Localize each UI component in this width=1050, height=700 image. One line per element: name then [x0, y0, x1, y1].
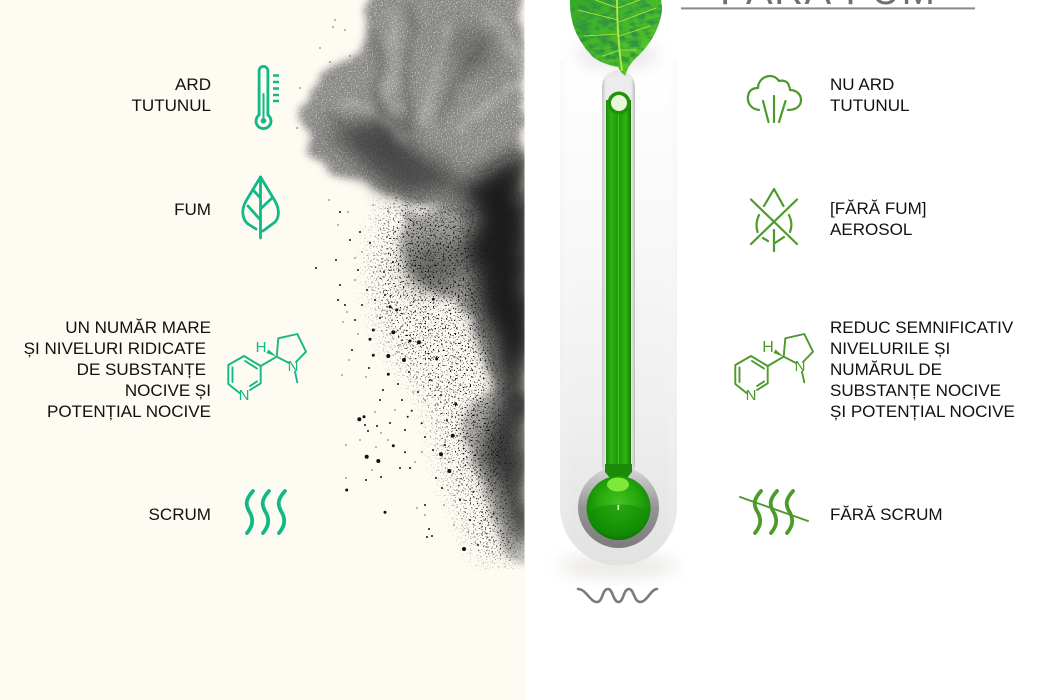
- tobacco leaf: [570, 0, 662, 76]
- icon: crossed-out leaf: [751, 189, 797, 251]
- glass tube: [602, 70, 635, 480]
- icon: thermometer: [256, 66, 279, 129]
- thermometer casing: [560, 60, 677, 566]
- left background panel: [0, 0, 525, 700]
- squiggle under thermometer: [578, 589, 657, 602]
- green bulb: [586, 476, 650, 540]
- thermometer shadow: [558, 554, 678, 578]
- left text: ard tutunul: TUTUNUL: [132, 96, 211, 115]
- right text: reduced substances: NUMĂRUL DE: [830, 360, 942, 379]
- left text: scrum: SCRUM: [149, 505, 211, 524]
- plume streaks: [330, 5, 522, 165]
- right text: reduced substances: NIVELURILE ȘI: [830, 339, 950, 358]
- icon: aerosol cloud: [748, 76, 801, 122]
- icon: ash waves: [247, 491, 285, 533]
- icon: nicotine molecule: N: [288, 358, 298, 375]
- icon: nicotine molecule, green: N: [795, 358, 805, 375]
- bulb ring: [578, 467, 659, 548]
- left text: harmful substances: NOCIVE ȘI: [125, 381, 211, 400]
- icon: nicotine molecule: H: [256, 339, 266, 356]
- thermometer with tobacco leaf: [558, 0, 678, 578]
- right text: reduced substances: REDUC SEMNIFICATIV: [830, 318, 1014, 337]
- green column: [606, 100, 631, 472]
- right text: reduced substances: ȘI POTENȚIAL NOCIVE: [830, 402, 1015, 421]
- right text: reduced substances: SUBSTANȚE NOCIVE: [830, 381, 1001, 400]
- icon: nicotine molecule: [228, 334, 306, 404]
- tube neck: [605, 464, 632, 478]
- left text: ard tutunul: ARD: [175, 75, 211, 94]
- right text: aerosol: AEROSOL: [830, 220, 912, 239]
- icon: crossed-out ash waves: [740, 491, 808, 533]
- icon: nicotine molecule: N: [239, 387, 249, 404]
- right text: does not burn tobacco: TUTUNUL: [830, 96, 909, 115]
- column top cap: [608, 92, 630, 114]
- left text: harmful substances: ȘI NIVELURI RIDICATE: [24, 339, 206, 358]
- right text: does not burn tobacco: NU ARD: [830, 75, 894, 94]
- icon: leaf: [243, 177, 278, 238]
- icon: nicotine molecule, green: N: [746, 387, 756, 404]
- right text: no ash: FĂRĂ SCRUM: [830, 505, 943, 524]
- left text: harmful substances: DE SUBSTANȚE: [77, 360, 206, 379]
- left text: harmful substances: UN NUMĂR MARE: [65, 318, 211, 337]
- right text: aerosol: [FĂRĂ FUM]: [830, 199, 927, 218]
- ash particles: [297, 20, 490, 549]
- icon: nicotine molecule, green: H: [762, 339, 774, 356]
- icon: nicotine molecule, green: [735, 334, 813, 404]
- smoke and ash cloud: [297, 0, 530, 566]
- left text: harmful substances: POTENȚIAL NOCIVE: [47, 402, 211, 421]
- left text: fum: FUM: [174, 200, 211, 219]
